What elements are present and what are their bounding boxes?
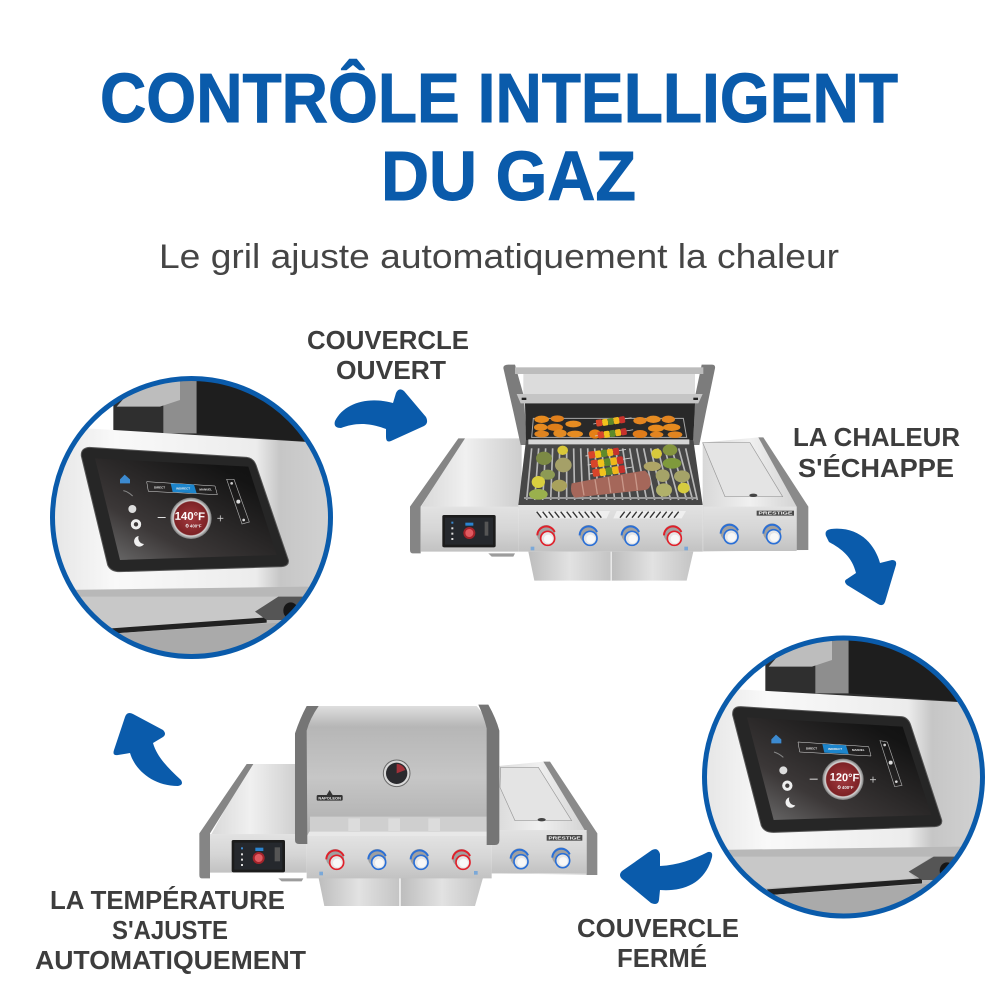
screen interface: ⏲ 400°F	[837, 785, 854, 790]
grill with open lid	[410, 365, 808, 581]
screen interface: 140°F	[175, 511, 205, 523]
lid arms	[503, 365, 715, 445]
control panel	[518, 505, 703, 552]
label: la température s'ajuste automatiquement: AUTOMATIQUEMENT	[35, 945, 306, 975]
background grill body	[55, 381, 328, 654]
knobs	[537, 523, 781, 545]
closed lid	[295, 705, 499, 845]
label: couvercle ouvert: OUVERT	[336, 355, 446, 385]
circle border	[52, 378, 330, 656]
screen interface: INDIRECT	[828, 747, 842, 751]
arrow: top, to open grill	[335, 389, 427, 442]
title: DU GAZ	[381, 137, 636, 215]
arrow: left, up to circle	[114, 713, 182, 786]
firebox	[518, 403, 703, 505]
temperature gauge	[383, 760, 410, 787]
screen interface: MANUEL	[199, 487, 212, 491]
left side shelf	[199, 764, 307, 881]
right side burner shelf	[492, 762, 597, 875]
screen interface: MANUEL	[852, 748, 865, 752]
screen interface	[771, 735, 902, 808]
right side burner shelf: PRESTIGE	[758, 511, 792, 516]
left side shelf	[410, 438, 522, 557]
label: la chaleur s'échappe: LA CHALEUR	[793, 422, 960, 452]
arrow: right, down to circle	[826, 529, 896, 605]
screen interface: ⏲ 400°F	[185, 524, 202, 529]
right side burner shelf: PRESTIGE	[548, 835, 581, 840]
label: couvercle ouvert	[307, 325, 469, 385]
tablet frame	[733, 707, 942, 832]
circle: tablet close-up 140°F	[40, 376, 340, 670]
screen interface: DIRECT	[806, 746, 817, 750]
screen interface: INDIRECT	[176, 486, 190, 490]
screen interface: 120°F	[830, 772, 860, 785]
label: couvercle fermé: COUVERCLE	[577, 913, 739, 943]
napoleon logo	[317, 790, 343, 801]
title: CONTRÔLE INTELLIGENT	[100, 58, 898, 137]
knobs	[326, 847, 570, 869]
label: la température s'ajuste automatiquement: LA TEMPÉRATURE	[50, 885, 285, 915]
roast meat	[571, 471, 651, 498]
control panel	[307, 837, 492, 878]
open lid interior	[515, 367, 703, 403]
napoleon logo: NAPOLEON	[318, 795, 341, 800]
label: la température s'ajuste automatiquement: S'AJUSTE	[112, 915, 228, 945]
title	[100, 58, 898, 215]
screen interface: DIRECT	[154, 486, 165, 490]
circle: tablet close-up 120°F	[692, 635, 992, 930]
circle border	[704, 638, 982, 916]
background grill body	[707, 640, 980, 914]
tablet screen	[750, 722, 920, 820]
tablet screen	[97, 462, 265, 560]
cart	[318, 877, 483, 906]
upper rack food	[534, 415, 682, 439]
label: couvercle ouvert: COUVERCLE	[307, 325, 469, 355]
grill with closed lid	[199, 705, 597, 906]
label: la chaleur s'échappe: S'ÉCHAPPE	[798, 453, 954, 483]
lower grate food	[529, 444, 690, 500]
subtitle: Le gril ajuste automatiquement la chaleur	[159, 238, 839, 276]
tablet frame	[81, 447, 288, 572]
right side burner shelf	[703, 437, 808, 552]
arrow: bottom, to closed grill	[620, 849, 712, 904]
side tablet	[442, 515, 496, 547]
label: couvercle fermé: FERMÉ	[617, 943, 707, 973]
label: couvercle fermé	[577, 913, 739, 973]
label: la chaleur s'échappe	[793, 422, 960, 483]
cart	[528, 552, 693, 581]
side tablet	[232, 840, 285, 872]
screen interface	[120, 475, 249, 547]
label: la température s'ajuste automatiquement	[35, 885, 306, 975]
